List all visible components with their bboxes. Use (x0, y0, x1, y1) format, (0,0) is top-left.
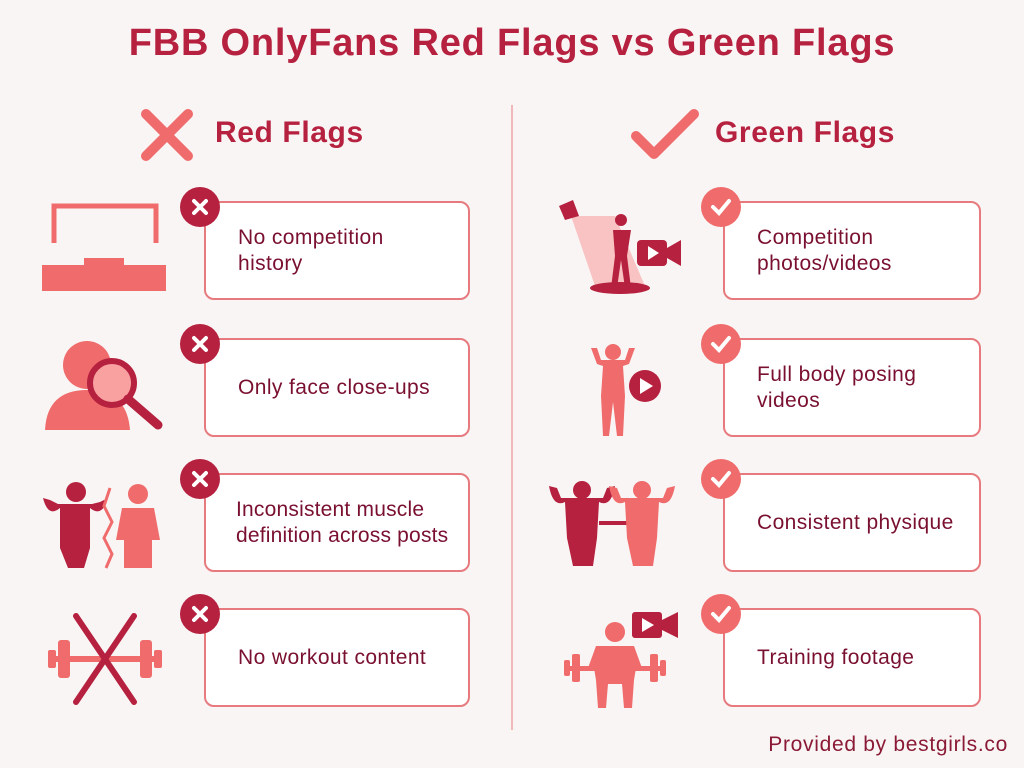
card: full body posing (723, 338, 981, 437)
card: no workout content: No workout content (238, 646, 426, 668)
card: only face close-ups (204, 338, 470, 437)
badge check 2 (701, 324, 741, 364)
icon: consistent physique (549, 481, 675, 566)
badge x 1 (180, 187, 220, 227)
card: competition photos: Competition (757, 226, 873, 248)
icon: empty stage (42, 204, 166, 291)
icon: posing video (591, 344, 661, 436)
icon: crossed dumbbell (48, 613, 162, 705)
card: training footage: Training footage (757, 646, 914, 668)
card: no competition history (204, 201, 470, 300)
badge x 4 (180, 594, 220, 634)
heading: red flags: Red Flags (215, 116, 364, 149)
card: no competition history: No competition (238, 226, 384, 248)
heading: green flags (631, 109, 895, 159)
icon: inconsistent muscles (43, 482, 160, 569)
card: no competition history: history (238, 252, 303, 274)
badge x 2 (180, 324, 220, 364)
card: consistent physique: Consistent physique (757, 510, 954, 534)
heading: green flags: Green Flags (715, 116, 895, 149)
card: full body posing: videos (757, 388, 820, 412)
icon: training footage (564, 612, 678, 708)
card: competition photos: photos/videos (757, 252, 892, 274)
badge check 1 (701, 187, 741, 227)
badge check 4 (701, 594, 741, 634)
footer credit: Provided by bestgirls.co (768, 733, 1008, 756)
badge x 3 (180, 459, 220, 499)
badge check 3 (701, 459, 741, 499)
card: inconsistent muscle: definition across posts (236, 524, 448, 546)
card: inconsistent muscle (204, 473, 470, 572)
heading: red flags (141, 109, 364, 161)
card: inconsistent muscle: Inconsistent muscle (236, 498, 424, 520)
card: no workout content (204, 608, 470, 707)
card: training footage (723, 608, 981, 707)
title: FBB OnlyFans Red Flags vs Green Flags (129, 22, 895, 64)
icon: spotlight stage (559, 200, 681, 294)
card: only face close-ups: Only face close-ups (238, 376, 430, 398)
divider (511, 105, 513, 730)
card: full body posing: Full body posing (757, 362, 916, 386)
icon: face magnifier (45, 341, 162, 430)
card: competition photos (723, 201, 981, 300)
card: consistent physique (723, 473, 981, 572)
